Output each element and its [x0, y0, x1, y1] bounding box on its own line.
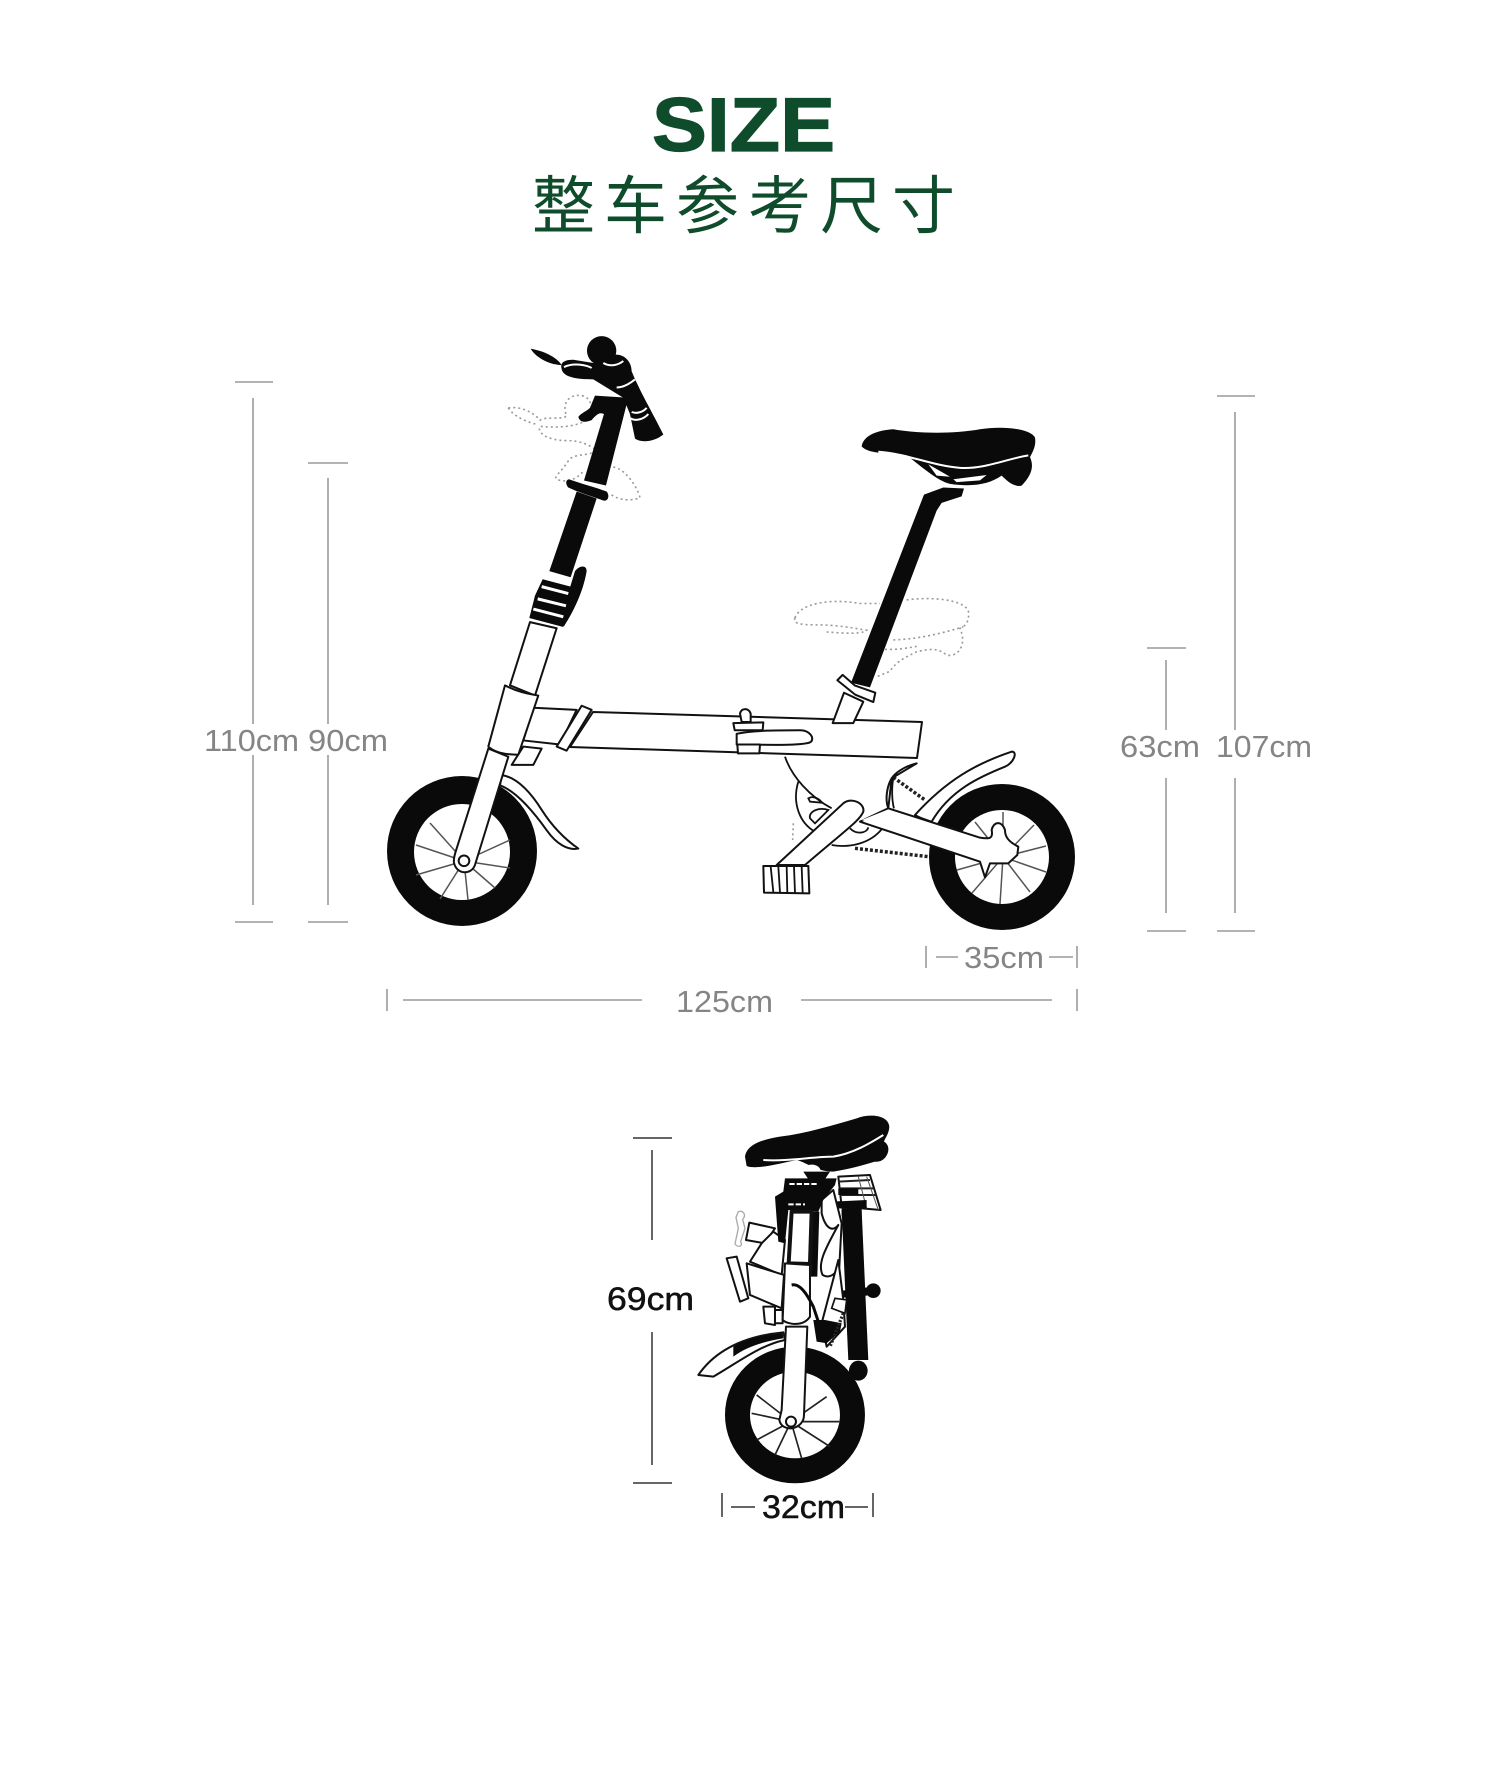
folded axle knob [849, 1361, 868, 1381]
dimension: 107cm: 107cm [1216, 729, 1312, 764]
handlebar grip, bell and brake lever [531, 336, 663, 441]
head tube joint and clamp [512, 706, 592, 765]
dimensions: unfolded bicycle [204, 382, 1312, 1019]
dimension: 69cm: 69cm [607, 1281, 694, 1317]
dotted folded handlebar [508, 395, 640, 500]
rear fender [915, 752, 1015, 822]
dimension: 35cm: 35cm [964, 940, 1044, 975]
chain [855, 777, 928, 857]
saddle [862, 428, 1035, 486]
crank arm and pedal [763, 801, 863, 893]
folded frame beam and clamp [727, 1257, 784, 1325]
folded frame, chain and crank [813, 1260, 847, 1347]
dimension: 32cm: 32cm [762, 1489, 845, 1525]
dimension: 90cm: 90cm [308, 723, 388, 758]
folded sleeve [783, 1212, 820, 1327]
stem rings and quick lever [529, 567, 587, 627]
front wheel [387, 776, 537, 926]
folded fender [698, 1332, 785, 1377]
dimension: 110cm: 110cm [204, 723, 299, 758]
dotted lowered saddle [795, 599, 969, 677]
folded black stem [833, 1200, 881, 1360]
dimension: 63cm: 63cm [1120, 729, 1200, 764]
rear triangle and dropout [860, 763, 1018, 877]
folded front wheel [725, 1347, 865, 1483]
folded hinge handle [735, 1211, 785, 1275]
title: SIZE: SIZE [652, 83, 835, 168]
subtitle: 整车参考尺寸: 整车参考尺寸 [532, 172, 964, 242]
folding hinge [733, 709, 812, 753]
chainring and guard [785, 757, 882, 846]
illustration: unfolded bicycle side view [387, 336, 1075, 930]
folded middle assembly [727, 1175, 881, 1360]
folded black headset block [775, 1178, 837, 1277]
frame main beam [570, 712, 922, 758]
handlebar stem [549, 396, 628, 577]
folded saddle [745, 1116, 889, 1182]
rear wheel [929, 784, 1075, 930]
folding sleeve and tube [488, 622, 557, 755]
dimension: 125cm: 125cm [676, 984, 773, 1019]
folded oval seat tube [821, 1190, 842, 1276]
seatpost [833, 487, 964, 723]
front fender [500, 775, 578, 849]
folded fork [779, 1327, 807, 1428]
front fork [454, 749, 508, 872]
folded lattice top [833, 1175, 881, 1217]
illustration: folded bicycle [698, 1116, 889, 1483]
